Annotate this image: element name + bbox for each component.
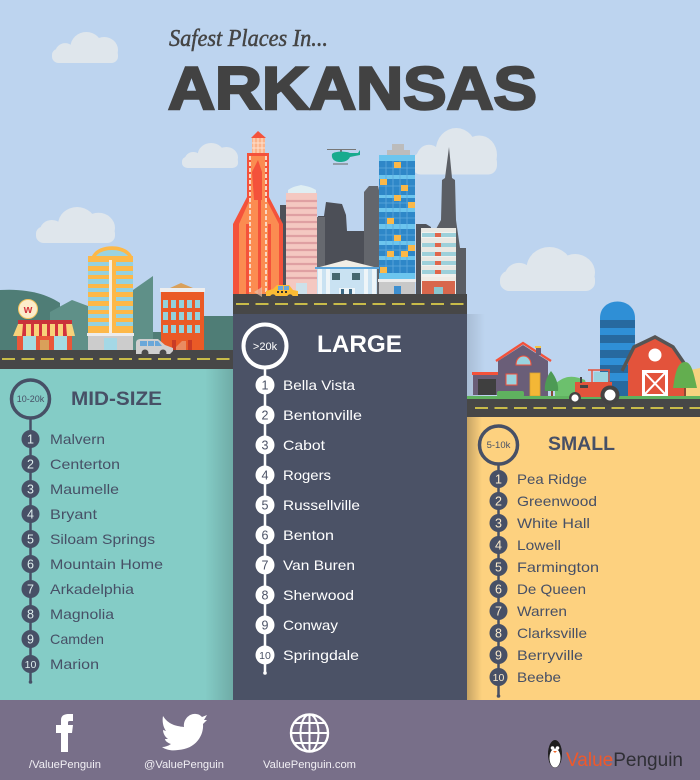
small tree: [545, 371, 558, 397]
dark skyline: [280, 147, 466, 294]
numbers: 4: [262, 468, 269, 482]
silo: [600, 302, 635, 398]
red tower: [233, 131, 283, 294]
numbers: 8: [262, 588, 269, 602]
numbers: 1: [495, 472, 502, 486]
names: Maumelle: [50, 481, 119, 497]
names: Malvern: [50, 431, 105, 447]
numbers: 5: [495, 560, 502, 574]
names: Farmington: [517, 559, 599, 575]
timeline: [12, 380, 50, 684]
pink tower: [286, 185, 317, 294]
numbers: 7: [262, 558, 269, 572]
badge: >20k: [253, 341, 278, 353]
numbers: 10: [25, 659, 36, 671]
numbers: 6: [27, 558, 34, 572]
scene: small farm: [467, 302, 700, 399]
shadow beside the large panel: [467, 314, 485, 398]
panel: mid-size: [0, 369, 233, 700]
names: [283, 377, 362, 663]
numbers: 7: [27, 582, 34, 596]
names: Sherwood: [283, 587, 354, 603]
hills: [555, 377, 590, 398]
list: mid-size: [12, 380, 163, 684]
tractor: [569, 370, 620, 404]
facebook handle: /ValuePenguin: [29, 759, 101, 771]
numbers: [259, 378, 271, 662]
markers: [256, 376, 274, 664]
numbers: 3: [495, 516, 502, 530]
names: Clarksville: [517, 625, 587, 641]
names: Bella Vista: [283, 377, 355, 393]
numbers: 3: [27, 482, 34, 496]
names: Cabot: [283, 437, 325, 453]
heading: LARGE: [317, 331, 402, 358]
helicopter: [327, 150, 360, 164]
names: Camden: [50, 631, 104, 647]
footer: [0, 700, 700, 780]
scene: mid-size town: [0, 246, 233, 350]
striped tower: [421, 228, 456, 294]
numbers: [25, 432, 36, 671]
heading: SMALL: [548, 433, 615, 455]
heading: MID-SIZE: [71, 388, 162, 410]
numbers: 5: [27, 532, 34, 546]
names: Siloam Springs: [50, 531, 155, 547]
numbers: 10: [493, 672, 504, 684]
names: Magnolia: [50, 606, 114, 622]
names: [50, 431, 163, 672]
title: script line: Safest Places In...: [169, 26, 328, 52]
numbers: 9: [27, 632, 34, 646]
names: De Queen: [517, 581, 586, 597]
timeline: [480, 426, 518, 698]
numbers: 8: [27, 608, 34, 622]
names: Arkadelphia: [50, 581, 134, 597]
numbers: 9: [262, 618, 269, 632]
names: Centerton: [50, 456, 120, 472]
names: Russellville: [283, 497, 360, 513]
numbers: 1: [262, 378, 269, 392]
wordmark: ValuePenguin: [566, 750, 683, 771]
names: Beebe: [517, 669, 561, 685]
clouds: [36, 32, 595, 291]
names: Bentonville: [283, 407, 362, 423]
numbers: 5: [262, 498, 269, 512]
road: large: [233, 294, 467, 314]
markers: [22, 430, 40, 673]
red brick building: [160, 283, 205, 350]
numbers: 2: [27, 458, 34, 472]
numbers: 9: [495, 648, 502, 662]
markers: [490, 470, 508, 686]
barn: [622, 336, 684, 398]
names: Rogers: [283, 467, 331, 483]
names: Pea Ridge: [517, 471, 587, 487]
panel: small: [467, 417, 700, 700]
timeline: [244, 324, 286, 675]
taxi: [254, 285, 298, 300]
numbers: 8: [495, 626, 502, 640]
badge: 10-20k: [17, 394, 45, 404]
website: ValuePenguin.com: [263, 759, 356, 771]
icon: globe: [291, 714, 328, 752]
store: w: [23, 304, 33, 316]
names: Bryant: [50, 506, 97, 522]
panel: large: [233, 313, 467, 700]
car: [136, 339, 186, 356]
icon: twitter: [162, 714, 207, 750]
names: Springdale: [283, 647, 359, 663]
badge: 5-10k: [487, 440, 511, 451]
names: Warren: [517, 603, 567, 619]
list: large: [244, 324, 402, 675]
icon: facebook: [56, 714, 73, 752]
names: Conway: [283, 617, 338, 633]
house: [472, 343, 551, 397]
numbers: 6: [262, 528, 269, 542]
names: Van Buren: [283, 557, 355, 573]
title: state name: ARKANSAS: [168, 55, 537, 122]
scene: large city: [233, 131, 466, 294]
names: White Hall: [517, 515, 590, 531]
numbers: 10: [259, 650, 271, 662]
logo: ValuePenguin: [548, 740, 683, 771]
names: Lowell: [517, 537, 561, 553]
panel shading: small: [467, 417, 482, 700]
numbers: 2: [495, 494, 502, 508]
numbers: 6: [495, 582, 502, 596]
names: Benton: [283, 527, 334, 543]
names: [517, 471, 599, 685]
numbers: 4: [495, 538, 502, 552]
twitter handle: @ValuePenguin: [144, 759, 224, 771]
large tree: [673, 362, 697, 398]
civic building: [315, 260, 379, 294]
names: Mountain Home: [50, 556, 163, 572]
yellow tower: [87, 246, 134, 350]
hills: [0, 290, 60, 350]
numbers: 4: [27, 508, 34, 522]
numbers: 7: [495, 604, 502, 618]
store: [13, 300, 75, 350]
names: Marion: [50, 656, 99, 672]
panel shading: mid-size: [205, 369, 233, 700]
blue glass tower: [378, 144, 416, 294]
numbers: 1: [27, 432, 34, 446]
names: Berryville: [517, 647, 583, 663]
ground strip: [467, 396, 700, 399]
road: mid-size: [0, 350, 233, 369]
road: small: [467, 399, 700, 417]
numbers: 2: [262, 408, 269, 422]
numbers: 3: [262, 438, 269, 452]
icon: penguin: [548, 740, 562, 768]
list: small: [480, 426, 615, 698]
numbers: [493, 472, 504, 684]
names: Greenwood: [517, 493, 597, 509]
